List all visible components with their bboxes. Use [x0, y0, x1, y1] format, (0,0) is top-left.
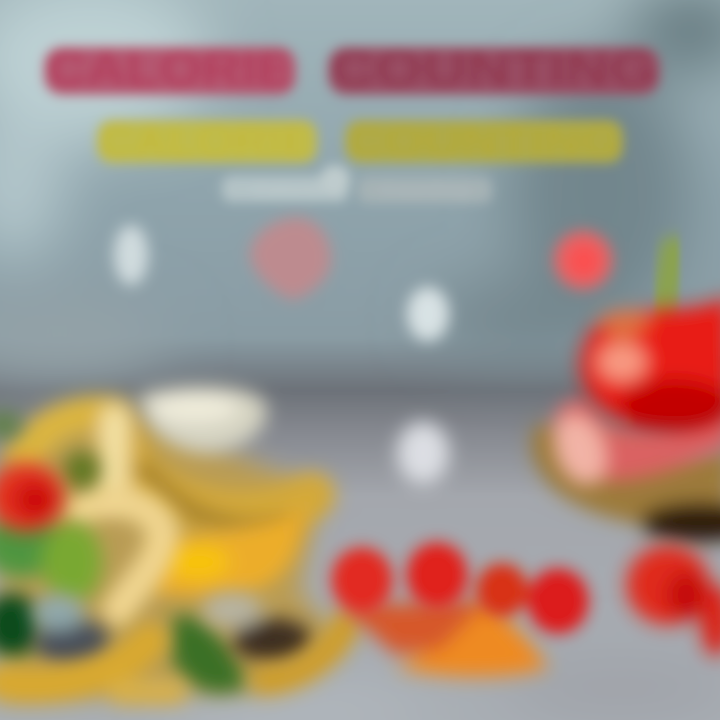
food: tomato left: [0, 463, 64, 531]
title: yellow: CALORIE: [99, 117, 313, 166]
subtitle: Counting: [381, 180, 469, 202]
food: white bowl: [140, 386, 267, 452]
burger with pepper: [531, 250, 720, 656]
icon: white marker left: [114, 225, 148, 285]
food: ham slice: [545, 399, 720, 492]
food: large tomato: [626, 545, 720, 656]
food: orange slices: [340, 598, 548, 677]
title: red: COUNTING: [331, 41, 657, 97]
food: salad base: [0, 410, 340, 700]
food: yellow pepper slice: [150, 505, 305, 596]
salad dish: [0, 386, 345, 700]
title: red: CALORIE: [47, 41, 293, 97]
subtitle: [222, 165, 492, 203]
food: pepper stem: [660, 250, 674, 325]
title: yellow: [97, 117, 623, 166]
subtitle: Calorie: [254, 180, 322, 202]
icon: pink heart: [250, 218, 331, 300]
food: red pepper: [580, 296, 720, 431]
food: green leaves: [0, 411, 248, 693]
food: cream ring: [80, 501, 163, 610]
food: tomatoes row: [331, 542, 589, 634]
title: red: [44, 41, 660, 97]
icon: white marker lower: [397, 422, 449, 484]
food: dark olives: [32, 592, 312, 666]
cherry tomatoes: [331, 542, 589, 677]
food: bread base: [531, 425, 720, 542]
title: yellow: COUNTING: [347, 117, 621, 166]
food: banana upper curve: [25, 414, 312, 528]
food: lower banana curves: [0, 625, 345, 692]
icon: red circle: [554, 231, 612, 289]
icon: white marker centre: [407, 287, 449, 341]
